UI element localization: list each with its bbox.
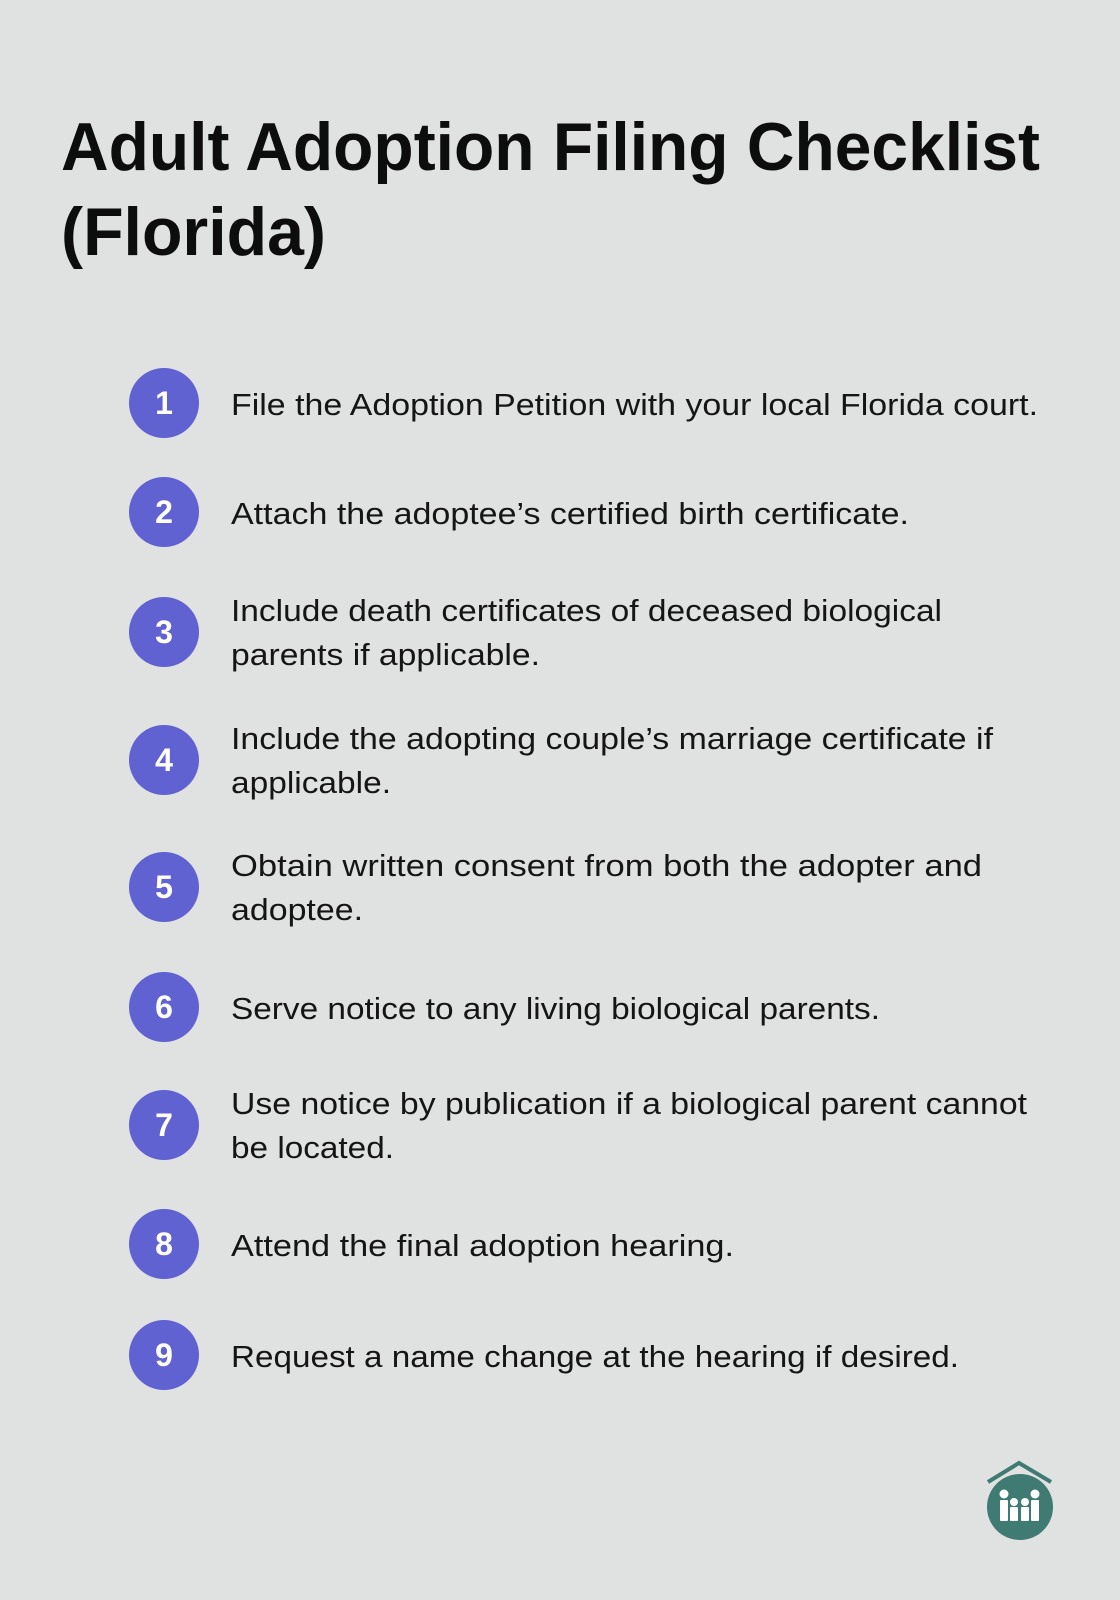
checklist <box>129 368 1038 1390</box>
title <box>61 109 1040 270</box>
item 1: 1 <box>155 385 173 421</box>
item 4: applicable. <box>231 765 391 800</box>
item 6: 6 <box>155 989 173 1025</box>
item 3: 3 <box>155 614 173 650</box>
item 5: Obtain written consent from both the adopter and <box>231 848 982 883</box>
item 2 <box>129 477 909 547</box>
item 8 <box>129 1209 734 1279</box>
item 7: Use notice by publication if a biological parent cannot <box>231 1086 1027 1121</box>
item 2: 2 <box>155 494 173 530</box>
item 4: Include the adopting couple’s marriage certificate if <box>231 721 993 756</box>
item 1: File the Adoption Petition with your local Florida court. <box>231 387 1038 422</box>
item 5: adoptee. <box>231 892 363 927</box>
item 3: Include death certificates of deceased biological <box>231 593 942 628</box>
item 5: 5 <box>155 869 173 905</box>
item 9: 9 <box>155 1337 173 1373</box>
item 7: 7 <box>155 1107 173 1143</box>
item 3 <box>129 593 942 672</box>
item 5 <box>129 848 982 927</box>
item 6 <box>129 972 880 1042</box>
item 4 <box>129 721 993 800</box>
icon: logo <box>987 1463 1053 1540</box>
item 1 <box>129 368 1038 438</box>
item 8: 8 <box>155 1226 173 1262</box>
item 9: Request a name change at the hearing if desired. <box>231 1339 959 1374</box>
item 2: Attach the adoptee’s certified birth certificate. <box>231 496 909 531</box>
title: (Florida) <box>61 194 326 270</box>
item 3: parents if applicable. <box>231 637 540 672</box>
item 7: be located. <box>231 1130 394 1165</box>
title: Adult Adoption Filing Checklist <box>61 109 1040 185</box>
item 4: 4 <box>155 742 173 778</box>
item 8: Attend the final adoption hearing. <box>231 1228 734 1263</box>
item 6: Serve notice to any living biological parents. <box>231 991 880 1026</box>
item 9 <box>129 1320 959 1390</box>
item 7 <box>129 1086 1027 1165</box>
